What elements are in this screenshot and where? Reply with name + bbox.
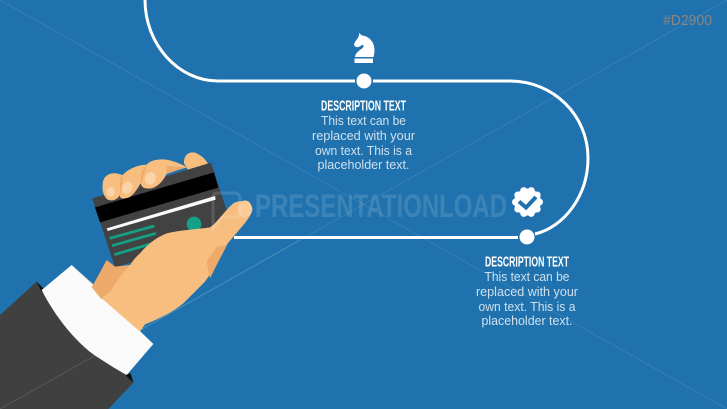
watermark icon [213, 193, 240, 229]
credit card [92, 163, 234, 267]
text block: top description: replaced with your [312, 129, 415, 143]
slide code label: #D2900 [663, 13, 712, 29]
path node: bottom [520, 230, 534, 244]
diagonal overlay [0, 240, 300, 409]
text block: top description: placeholder text. [318, 158, 410, 172]
watermark logo [213, 188, 507, 229]
winding path line [145, 0, 588, 238]
text block: top description: own text. This is a [315, 144, 412, 158]
fingers over card [103, 159, 187, 200]
thumb base shadow [207, 245, 227, 278]
back finger [184, 152, 209, 173]
text block: top description: DESCRIPTION TEXT [321, 98, 406, 114]
text block: bottom description: own text. This is a [478, 300, 576, 314]
shirt cuff [42, 265, 153, 375]
palm and thumb [102, 201, 252, 332]
jacket sleeve [0, 282, 133, 409]
text block: top description [312, 98, 415, 172]
text block: top description: This text can be [321, 114, 406, 128]
text block: bottom description: placeholder text. [482, 314, 572, 328]
text block: bottom description [476, 254, 578, 328]
icon: verified check badge [512, 187, 543, 217]
path node: top [356, 74, 372, 88]
text block: bottom description: replaced with your [476, 285, 578, 299]
thumb tip highlight [238, 200, 252, 218]
text block: bottom description: DESCRIPTION TEXT [485, 254, 569, 270]
illustration: hand holding credit card [0, 152, 252, 409]
watermark wordmark: PRESENTATIONLOAD [255, 188, 507, 224]
icon: chess knight [354, 33, 374, 63]
text block: bottom description: This text can be [484, 270, 570, 284]
palm shadow [92, 260, 130, 299]
